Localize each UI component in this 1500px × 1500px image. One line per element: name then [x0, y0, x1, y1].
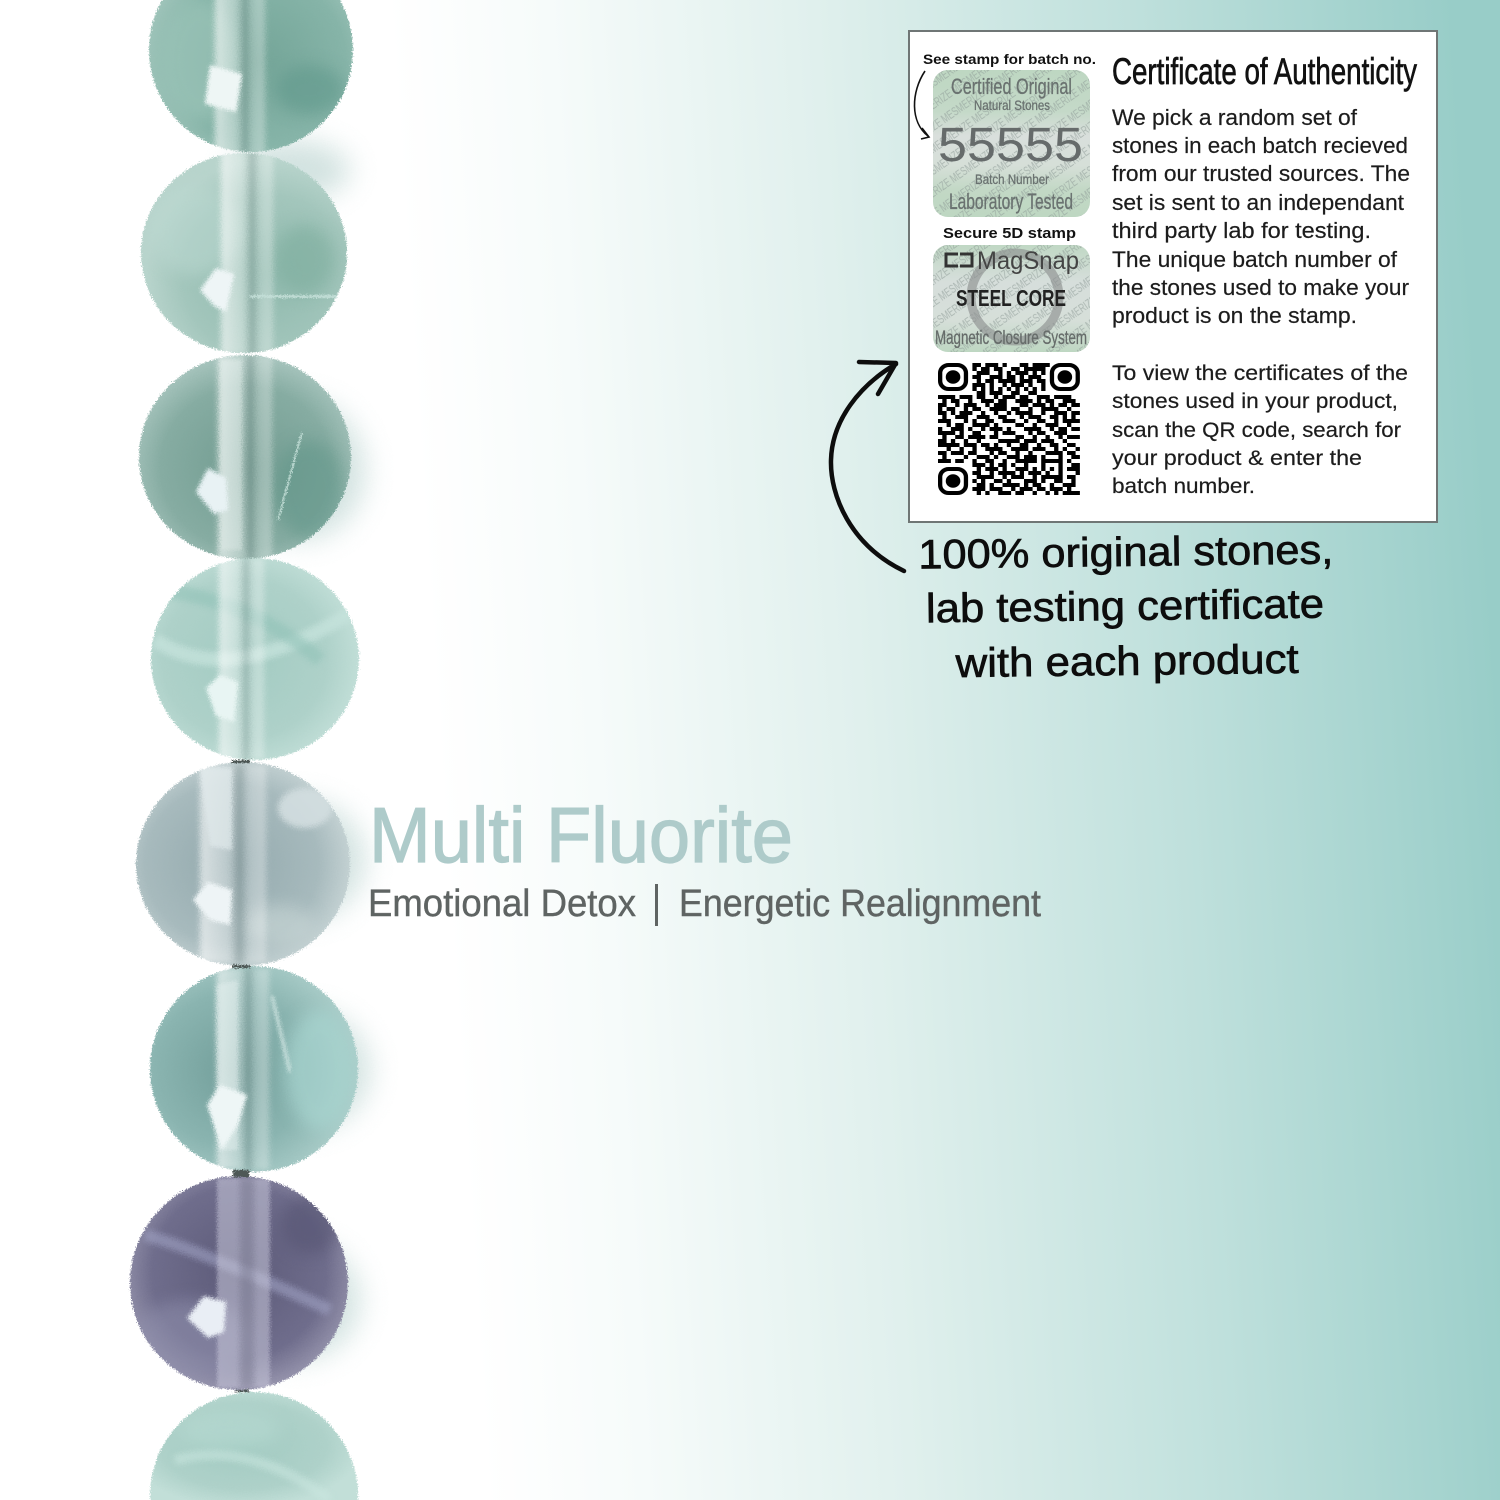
certificate paragraph 1: We pick a random set of [1112, 105, 1358, 130]
stamp caption: See stamp for batch no. [923, 52, 1096, 67]
bead 6: teal [146, 964, 362, 1176]
certificate paragraph 1: The unique batch number of [1112, 247, 1398, 272]
bead 7: purple [126, 1172, 352, 1394]
bead 8: pale green, cropped at bottom [146, 1390, 362, 1500]
bead strand [126, 0, 370, 1500]
qr code [938, 365, 1080, 493]
bead 3: mid green [135, 352, 357, 562]
string knots between beads [232, 760, 250, 1392]
batch stamp: Batch Number [975, 171, 1049, 187]
bead shadows [230, 140, 370, 1360]
certificate paragraph 1: set is sent to an independant [1112, 190, 1404, 215]
arrow: callout to certificate [831, 362, 904, 571]
certificate paragraph 2: batch number. [1112, 474, 1255, 498]
title: Multi Fluorite [369, 791, 793, 879]
magsnap stamp: Magnetic Closure System [935, 328, 1087, 349]
bead 2: light green [135, 150, 355, 360]
batch stamp [933, 70, 1090, 217]
batch stamp: 55555 [938, 119, 1083, 172]
certificate paragraph 1: third party lab for testing. [1112, 218, 1371, 243]
certificate paragraph 2: To view the certificates of the [1112, 361, 1408, 385]
certificate paragraph 1 [1112, 105, 1410, 328]
magsnap stamp: MagSnap [977, 247, 1079, 275]
bead 1: green, cropped at top [148, 0, 354, 153]
subtitle: Energetic Realignment [679, 883, 1041, 925]
batch stamp: Natural Stones [974, 97, 1050, 113]
batch stamp: Laboratory Tested [949, 189, 1073, 214]
magsnap stamp: STEEL CORE [956, 285, 1066, 311]
subtitle [368, 883, 1041, 926]
certificate paragraph 1: product is on the stamp. [1112, 303, 1357, 328]
callout text: 100% original stones, [918, 526, 1334, 578]
callout text [918, 526, 1335, 687]
magsnap stamp [933, 245, 1090, 352]
certificate paragraph 2: your product & enter the [1112, 446, 1362, 470]
certificate paragraph 2: stones used in your product, [1112, 389, 1398, 413]
bead 5: gray-blue [130, 760, 356, 968]
panel: certificate of authenticity [909, 31, 1437, 522]
stamp caption 2: Secure 5D stamp [943, 225, 1076, 242]
certificate paragraph 2 [1112, 361, 1408, 498]
subtitle: Emotional Detox [368, 883, 636, 925]
certificate paragraph 1: stones in each batch recieved [1112, 133, 1408, 158]
certificate paragraph 1: from our trusted sources. The [1112, 161, 1410, 186]
callout text: lab testing certificate [926, 581, 1324, 631]
batch stamp: Certified Original [951, 74, 1072, 99]
bead 4: pale green [148, 556, 362, 762]
icon: small arrow to stamp [914, 71, 929, 139]
callout text: with each product [954, 636, 1300, 686]
certificate paragraph 1: the stones used to make your [1112, 275, 1409, 300]
certificate paragraph 2: scan the QR code, search for [1112, 418, 1401, 442]
